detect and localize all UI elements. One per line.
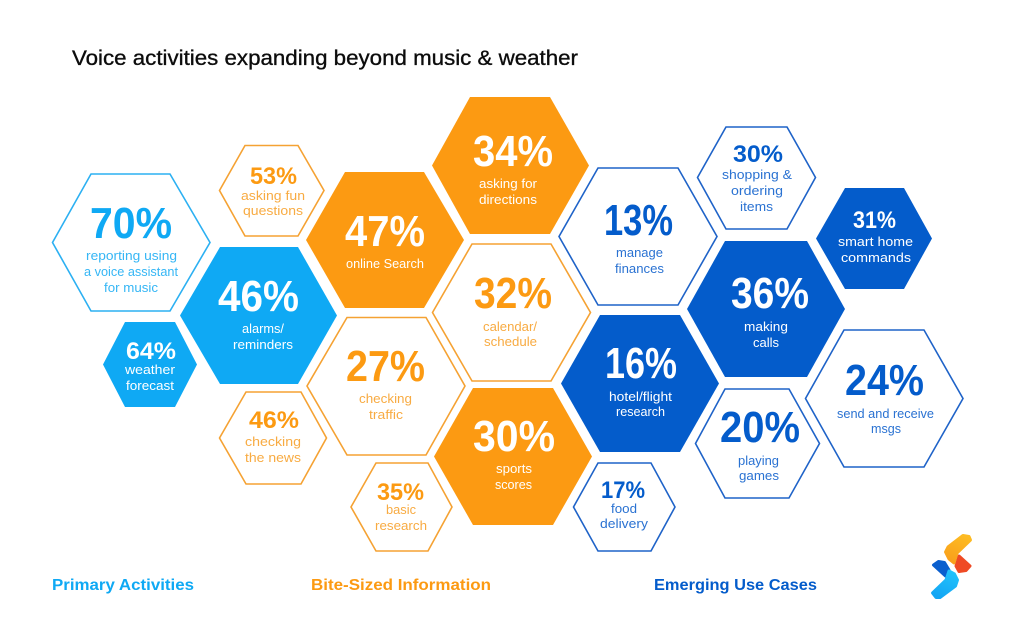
hexagon: 30% shopping: shopping & <box>722 167 792 182</box>
hexagon: 13% finances <box>559 168 717 305</box>
hexagon: 46% news <box>220 392 326 484</box>
hexagon: 30% shopping: 30% <box>733 141 783 168</box>
hexagon: 16% hotel flight: hotel/flight <box>609 389 672 404</box>
hexagon: 20% games: games <box>739 468 779 483</box>
hexagon: 13% finances: manage <box>616 245 663 260</box>
hexagon: 36% calls <box>687 241 845 377</box>
hexagon: 30% sports: 30% <box>473 412 555 461</box>
hexagon: 36% calls: calls <box>753 335 779 350</box>
hexagon: 13% finances: 13% <box>604 196 673 245</box>
hexagon: 30% shopping <box>698 127 816 229</box>
hexagon: 24% messages <box>806 330 963 467</box>
hexagon: 24% messages: msgs <box>871 421 901 436</box>
hexagon: 30% sports <box>434 388 592 525</box>
hexagon: 20% games <box>696 389 820 498</box>
hexagon: 20% games: playing <box>738 453 779 468</box>
hexagon: 35% research: research <box>375 518 427 533</box>
hexagon: 24% messages: 24% <box>845 356 924 405</box>
legend: primary activities: Primary Activities <box>52 577 194 594</box>
hexagon: 31% smart home <box>816 188 932 289</box>
hexagon: 32% calendar <box>432 244 590 381</box>
hexagon: 53% fun questions: asking fun <box>241 188 305 203</box>
hexagon: 32% calendar: 32% <box>474 269 552 318</box>
hexagon: 35% research: 35% <box>377 479 424 506</box>
hexagon: 70% music: 70% <box>90 199 172 248</box>
hexagon: 31% smart home: 31% <box>853 207 896 234</box>
hexagon: 34% directions: directions <box>479 192 538 207</box>
hexagon: 27% traffic: checking <box>359 391 412 406</box>
hexagon: 32% calendar: calendar/ <box>483 319 537 334</box>
hexagon: 70% music: a voice assistant <box>84 264 178 279</box>
hexagon: 13% finances: finances <box>615 261 665 276</box>
hexagon: 53% fun questions: questions <box>243 203 304 218</box>
hexagon: 17% food delivery: 17% <box>601 477 645 504</box>
hexagon: 30% sports: scores <box>495 477 532 492</box>
legend: emerging use cases: Emerging Use Cases <box>654 577 817 594</box>
hexagon: 46% news: 46% <box>249 407 299 434</box>
hexagon: 31% smart home: smart home <box>838 234 913 249</box>
hexagon: 70% music: for music <box>104 280 159 295</box>
hexagon: 35% research: basic <box>386 502 416 517</box>
hexagon: 30% shopping: ordering <box>731 183 783 198</box>
hexagon: 20% games: 20% <box>720 403 800 452</box>
hexagon: 64% weather: 64% <box>126 338 176 365</box>
hexagon: 16% hotel flight: 16% <box>605 339 677 388</box>
hexagon: 47% online search: 47% <box>345 207 425 256</box>
hexagon: 46% news: the news <box>245 450 302 465</box>
hexagon: 64% weather: forecast <box>126 378 174 393</box>
hexagon: 17% food delivery <box>574 463 675 551</box>
hexagon: 30% shopping: items <box>740 199 774 214</box>
hexagon: 46% alarms: 46% <box>218 272 299 321</box>
hexagon: 47% online search: online Search <box>346 256 424 271</box>
hexagon: 31% smart home: commands <box>841 250 912 265</box>
hexagon: 64% weather <box>103 322 197 407</box>
hexagon: 46% alarms: alarms/ <box>242 321 284 336</box>
hexagon: 47% online search <box>306 172 464 308</box>
hexagon: 36% calls: 36% <box>731 269 809 318</box>
hexagon: 70% music: reporting using <box>86 248 177 263</box>
title: Voice activities expanding beyond music & weather <box>72 46 578 70</box>
hexagon: 53% fun questions: 53% <box>250 163 297 190</box>
hexagon: 46% news: checking <box>245 434 301 449</box>
hexagon: 35% research <box>351 463 452 551</box>
hexagon: 34% directions <box>432 97 589 234</box>
legend: bite-sized information: Bite-Sized Information <box>311 577 491 594</box>
hexagon: 36% calls: making <box>744 319 788 334</box>
hexagon: 27% traffic: traffic <box>369 407 404 422</box>
hexagon: 30% sports: sports <box>496 461 533 476</box>
icon: logo <box>932 536 970 598</box>
hexagon: 53% fun questions <box>220 146 324 236</box>
hexagon: 17% food delivery: food <box>611 501 637 516</box>
hexagon: 70% music <box>52 174 210 311</box>
hexagon: 46% alarms: reminders <box>233 337 294 352</box>
hexagon: 34% directions: asking for <box>479 176 538 191</box>
hexagon: 32% calendar: schedule <box>484 334 537 349</box>
hexagon: 16% hotel flight <box>561 315 719 452</box>
hexagon: 46% alarms <box>180 247 337 384</box>
hexagon: 24% messages: send and receive <box>837 406 934 421</box>
hexagon: 34% directions: 34% <box>473 127 553 176</box>
hexagon: 27% traffic <box>307 318 465 455</box>
hexagon: 16% hotel flight: research <box>616 404 665 419</box>
hexagon: 27% traffic: 27% <box>346 342 425 391</box>
hexagon: 17% food delivery: delivery <box>600 516 649 531</box>
hexagon: 64% weather: weather <box>124 362 176 377</box>
